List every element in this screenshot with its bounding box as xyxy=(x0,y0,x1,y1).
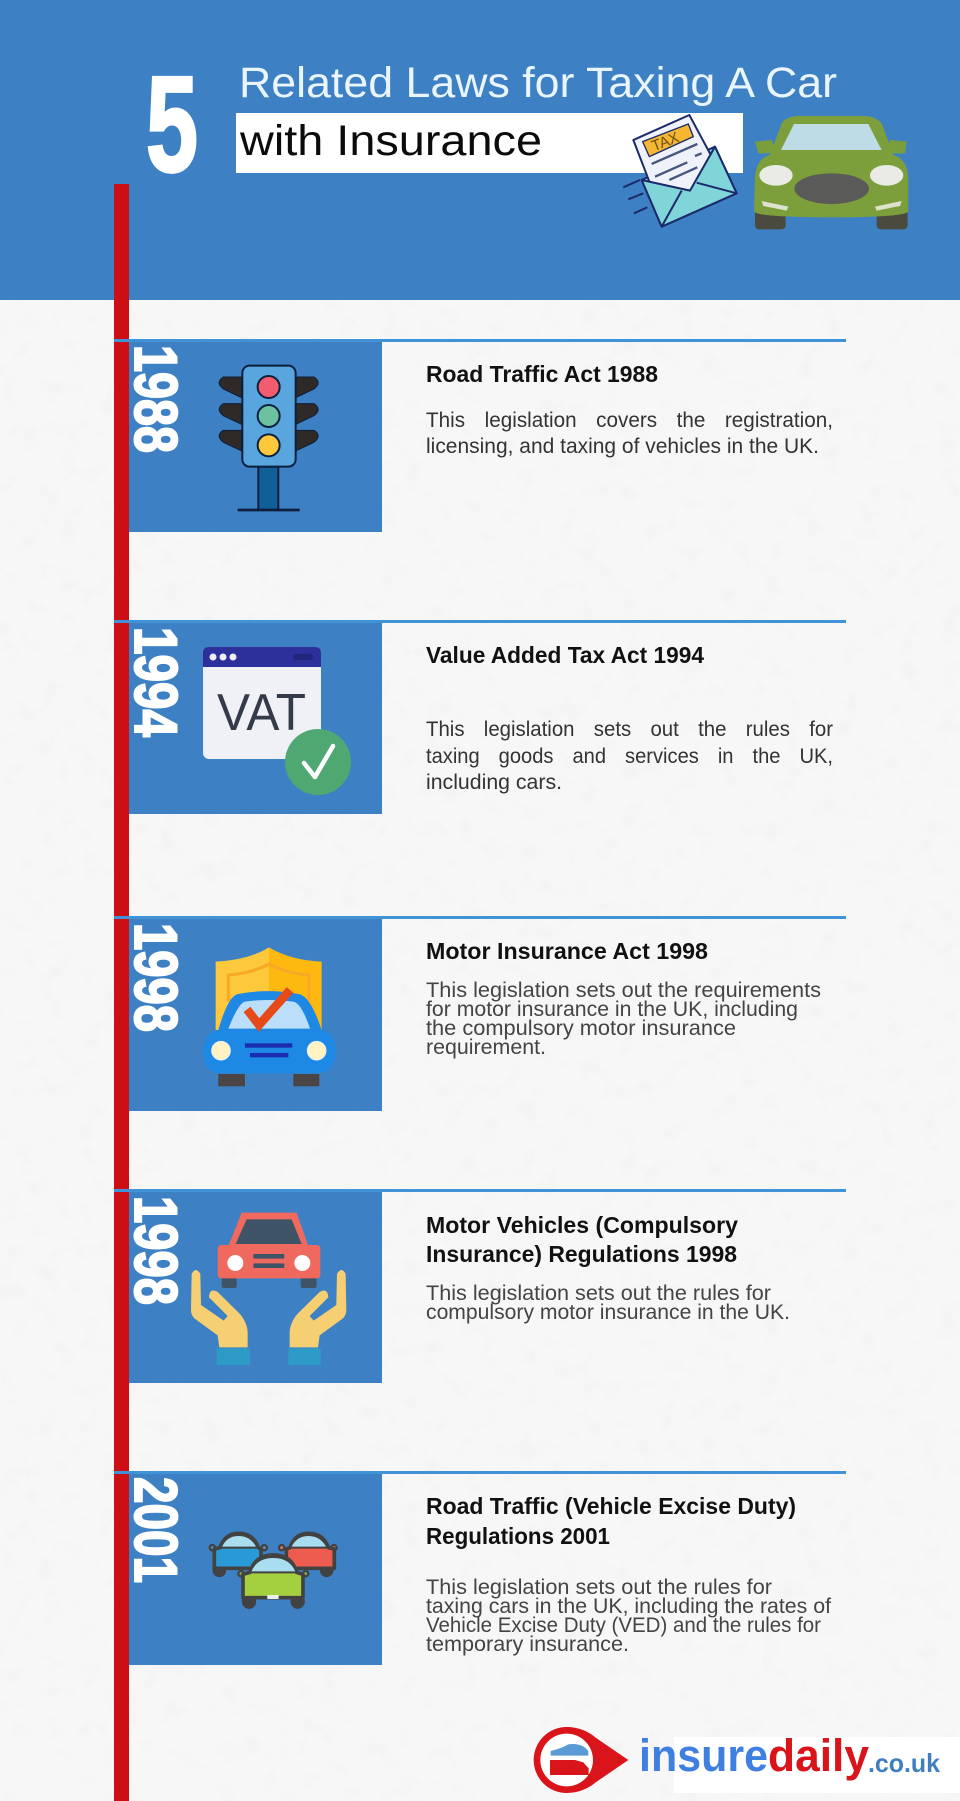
icon: tax envelope: TAX xyxy=(649,129,682,155)
heading: Motor Vehicles (Compulsory xyxy=(426,1212,738,1238)
year 1994: 1994 xyxy=(122,627,189,738)
year 1998: 1998 xyxy=(122,923,189,1032)
icon: three cars xyxy=(210,1533,337,1607)
icon: green car xyxy=(754,116,908,229)
body text xyxy=(426,1576,831,1656)
header band xyxy=(0,0,960,300)
row 2: Value Added Tax Act 1994 xyxy=(114,620,846,814)
heading: Road Traffic (Vehicle Excise Duty) xyxy=(426,1493,796,1519)
year 2001: 2001 xyxy=(122,1477,189,1583)
body text xyxy=(426,1282,790,1324)
body text: including cars. xyxy=(426,771,562,794)
icon: tax envelope xyxy=(623,115,737,227)
row 3: Motor Insurance Act 1998 xyxy=(114,916,846,1111)
body text: licensing, and taxing of vehicles in the UK. xyxy=(426,435,819,458)
body text: requirement. xyxy=(426,1036,546,1059)
icon: hands holding car xyxy=(191,1213,346,1365)
divider line xyxy=(114,1471,846,1474)
panel: 1988 xyxy=(129,340,382,532)
icon: logo pin xyxy=(534,1727,628,1793)
heading: Insurance) Regulations 1998 xyxy=(426,1241,737,1267)
heading xyxy=(426,1493,796,1549)
divider line xyxy=(114,339,846,342)
divider line xyxy=(114,1189,846,1192)
title line 2 box xyxy=(236,113,743,173)
body text: This legislation covers the registration, xyxy=(426,409,833,432)
row 4: Motor Vehicles (Compulsory Insurance) Regulations 1998 xyxy=(114,1189,846,1383)
title line 1: Related Laws for Taxing A Car xyxy=(239,59,837,107)
panel: 1998 xyxy=(129,918,382,1111)
body text: temporary insurance. xyxy=(426,1633,629,1656)
heading: Regulations 2001 xyxy=(426,1523,610,1549)
title number 5: 5 xyxy=(146,48,198,200)
body text: This legislation sets out the rules for xyxy=(426,1576,772,1599)
divider line xyxy=(114,916,846,919)
icon: traffic light xyxy=(219,366,318,510)
year 1988: 1988 xyxy=(122,345,189,453)
logo domain: .co.uk xyxy=(868,1748,941,1778)
body text: the compulsory motor insurance xyxy=(426,1017,736,1040)
body text: taxing cars in the UK, including the rates of xyxy=(426,1595,831,1618)
logo: insuredaily.co.uk xyxy=(534,1727,960,1793)
timeline bar xyxy=(114,184,129,1801)
icon: VAT window: VAT xyxy=(217,684,306,742)
row 1: Road Traffic Act 1988 xyxy=(114,339,846,532)
body text: This legislation sets out the rules for xyxy=(426,1282,771,1305)
body text xyxy=(426,718,833,794)
heading xyxy=(426,1212,738,1267)
body text xyxy=(426,979,821,1059)
body text xyxy=(426,409,833,458)
body text: taxing goods and services in the UK, xyxy=(426,745,833,768)
heading: Value Added Tax Act 1994 xyxy=(426,642,704,668)
icon: VAT window xyxy=(203,647,351,795)
body text: This legislation sets out the rules for xyxy=(426,718,833,741)
heading: Motor Insurance Act 1998 xyxy=(426,938,708,964)
panel: 2001 xyxy=(129,1473,382,1665)
year 1998: 1998 xyxy=(122,1196,189,1305)
row 5: Road Traffic (Vehicle Excise Duty) Regulations 2001 xyxy=(114,1471,846,1665)
body text: compulsory motor insurance in the UK. xyxy=(426,1301,790,1324)
body text: Vehicle Excise Duty (VED) and the rules for xyxy=(426,1614,821,1637)
icon: insured car with shield xyxy=(203,947,336,1086)
title line 2 box: with Insurance xyxy=(239,117,542,165)
body text: This legislation sets out the requirements xyxy=(426,979,821,1002)
heading: Road Traffic Act 1988 xyxy=(426,361,658,387)
panel: 1998 xyxy=(129,1191,382,1383)
panel: 1994 xyxy=(129,622,382,814)
logo wordmark insure: insure xyxy=(639,1730,768,1781)
body text: for motor insurance in the UK, including xyxy=(426,998,798,1021)
logo wordmark daily: daily xyxy=(768,1730,869,1781)
divider line xyxy=(114,620,846,623)
